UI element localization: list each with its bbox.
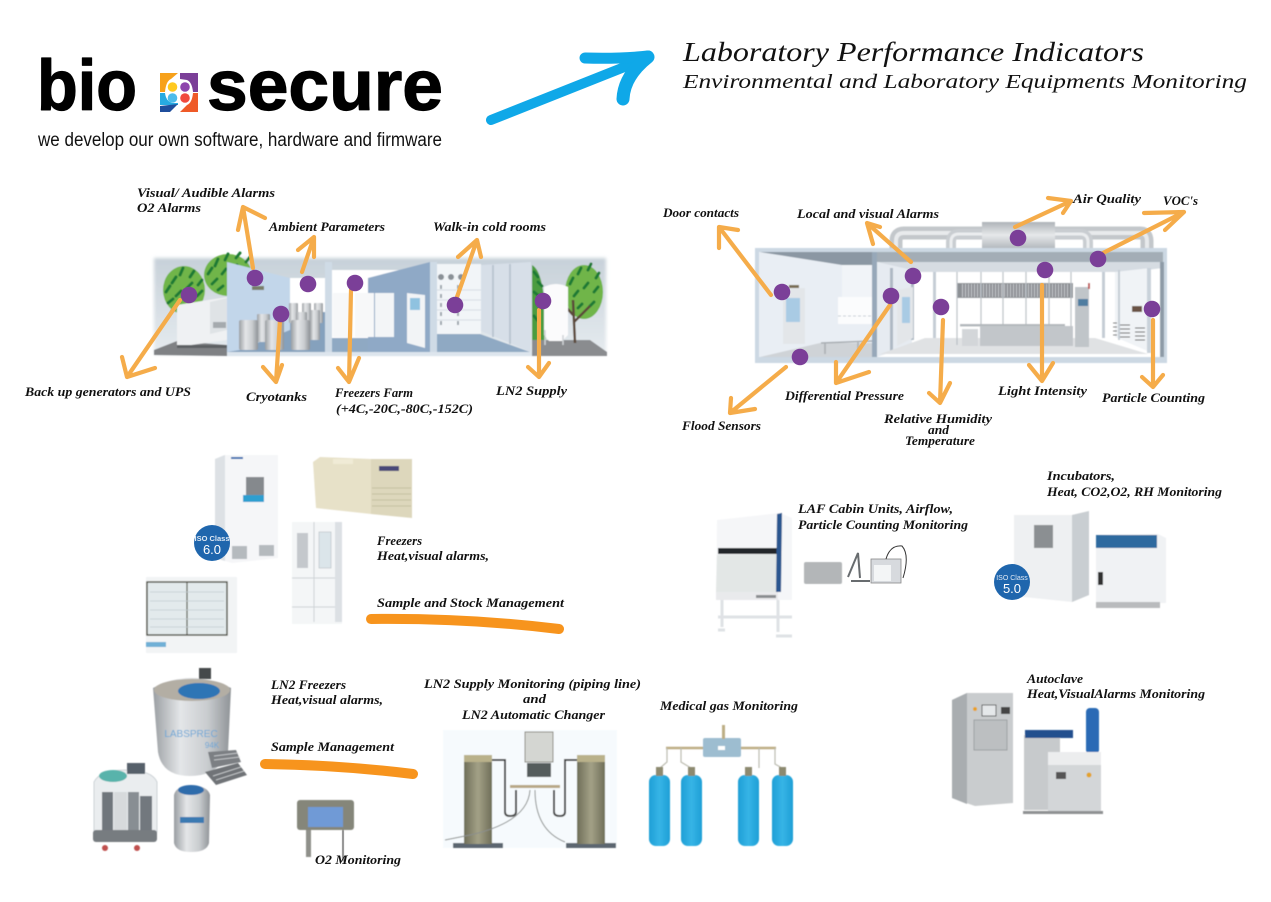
arrow: blue header arrow: [491, 56, 648, 120]
label: autoclave: Autoclave: [1026, 671, 1083, 686]
subtitle: Environmental and Laboratory Equipments Monitoring: [682, 71, 1247, 93]
label: flood sensors: Flood Sensors: [681, 418, 761, 433]
arrow: LN2 supply: [528, 310, 549, 377]
panel: LN2 automatic changer: [443, 730, 617, 848]
label: autoclave monitoring: Heat,VisualAlarms Monitoring: [1026, 686, 1206, 701]
label: relative humidity and temperature: [883, 411, 992, 448]
label: door contacts: Door contacts: [662, 205, 739, 220]
tagline: we develop our own software, hardware and firmware: [37, 130, 442, 151]
label: ambient parameters: Ambient Parameters: [268, 219, 385, 234]
label: LN2 heat visual alarms: Heat,visual alarms,: [270, 692, 383, 707]
underline stroke: freezers: [371, 619, 559, 629]
label: air quality: Air Quality: [1072, 191, 1141, 206]
badge: ISO class 6.0: 6.0: [203, 542, 221, 557]
arrow: VOC: [1103, 212, 1184, 253]
sensor dots: cleanroom: [774, 230, 1160, 365]
label: heat visual alarms: Heat,visual alarms,: [376, 548, 489, 563]
badge: ISO class 5.0: [994, 564, 1030, 600]
label: LN2 freezers: LN2 Freezers: [270, 677, 346, 692]
badge: ISO class 6.0: [194, 525, 230, 561]
sensor dots: facility: [181, 270, 551, 322]
device: particle counter tank: [804, 562, 842, 584]
arrow: cryotanks: [263, 320, 282, 382]
panel: medical gas manifold: [649, 725, 793, 846]
badge: ISO class 5.0: 5.0: [1003, 581, 1021, 596]
label: sample management: Sample Management: [271, 739, 394, 754]
arrow: air quality: [1015, 198, 1071, 227]
label: freezer temperatures: (+4C,-20C,-80C,-152C): [336, 401, 473, 416]
panel: storage facility illustration: [154, 253, 607, 356]
freezer: upright ULT: [215, 455, 278, 563]
label: cryotanks: Cryotanks: [246, 389, 307, 404]
label: LAF cabin units: LAF Cabin Units, Airflow,: [797, 501, 953, 516]
LN2 freezer: large tank: [153, 668, 247, 785]
logo: biosecure: [37, 47, 443, 126]
freezer: double door: [292, 522, 342, 624]
underline stroke: LN2: [265, 764, 413, 774]
panel: freezers: [146, 455, 412, 653]
label: incubator monitoring: Heat, CO2,O2, RH Monitoring: [1046, 484, 1223, 499]
label: relative humidity and temperature: and: [928, 422, 950, 437]
logo: biosecure: secure: [207, 47, 443, 126]
label: medical gas monitoring: Medical gas Monitoring: [659, 698, 799, 713]
incubator: oven: [1096, 534, 1166, 608]
arrow: relative humidity: [929, 320, 950, 403]
label: LN2 supply monitoring: LN2 Automatic Changer: [461, 707, 606, 722]
icon: logo mosaic: [160, 73, 198, 112]
label: particle counting monitoring: Particle Counting Monitoring: [798, 517, 969, 532]
label: local and visual alarms: Local and visual Alarms: [796, 206, 939, 221]
arrow: flood sensors: [730, 367, 786, 413]
label: LN2 supply monitoring: and: [523, 691, 547, 706]
panel: LN2 freezers: [93, 668, 247, 852]
label: relative humidity and temperature: Temperature: [905, 433, 975, 448]
arrow: local alarms: [867, 223, 911, 262]
arrow: freezers farm: [338, 290, 359, 382]
label: particle counting: Particle Counting: [1102, 390, 1206, 405]
label: VOC: VOC's: [1163, 193, 1198, 208]
label: differential pressure: Differential Pressure: [784, 388, 904, 403]
logo: biosecure: bio: [37, 47, 137, 126]
label: light intensity: Light Intensity: [997, 383, 1087, 398]
arrow: light intensity: [1029, 285, 1053, 381]
arrow: door contacts: [719, 227, 771, 295]
autoclave: benchtop units: [1023, 708, 1103, 814]
arrow: back up generators: [122, 300, 180, 377]
label: incubators: Incubators,: [1046, 468, 1115, 483]
label: LN2 supply: LN2 Supply: [495, 383, 567, 398]
label: visual audible alarms: Visual/ Audible Alarms: [137, 185, 275, 200]
arrow: particle counting: [1142, 320, 1163, 387]
label: O2 alarms: O2 Alarms: [137, 200, 201, 215]
arrow: differential pressure: [836, 305, 890, 383]
arrow: walk-in cold rooms: [457, 240, 481, 297]
label: walk-in cold rooms: Walk-in cold rooms: [433, 219, 546, 234]
label: freezers: Freezers: [376, 533, 422, 548]
panel: laminar flow cabinet: [716, 513, 792, 636]
device: particle counter: [871, 546, 906, 583]
label: back up generators: Back up generators and UPS: [24, 384, 191, 399]
label: LN2 supply monitoring: LN2 Supply Monitoring (piping line): [423, 676, 641, 691]
title: Laboratory Performance Indicators: [682, 37, 1144, 67]
LN2 freezer: dewar: [174, 785, 210, 852]
label: sample and stock management: Sample and Stock Management: [377, 595, 564, 610]
arrow: visual alarms: [238, 207, 265, 268]
LN2 freezer: open rack: [93, 763, 157, 851]
freezer: chest: [313, 457, 412, 518]
freezer: glass display: [146, 577, 237, 653]
panel: cleanroom illustration: [755, 222, 1167, 363]
LN2 freezer: large tank: LABSPREC: [164, 729, 218, 740]
device: sampling probe: [848, 553, 870, 581]
label: O2 monitoring: O2 Monitoring: [315, 852, 402, 867]
device: O2 monitor: [297, 800, 354, 861]
badge: ISO class 6.0: ISO Class: [194, 534, 230, 543]
incubator: CO2: [1014, 511, 1089, 602]
label: freezers farm: Freezers Farm: [334, 385, 413, 400]
LN2 freezer: large tank: 94K: [205, 741, 220, 750]
label: LN2 supply monitoring: [423, 676, 641, 722]
label: relative humidity and temperature: Relative Humidity: [883, 411, 992, 426]
arrow: ambient parameters: [298, 237, 314, 272]
autoclave: large floor unit: [952, 693, 1013, 806]
badge: ISO class 5.0: ISO Class: [996, 575, 1028, 582]
